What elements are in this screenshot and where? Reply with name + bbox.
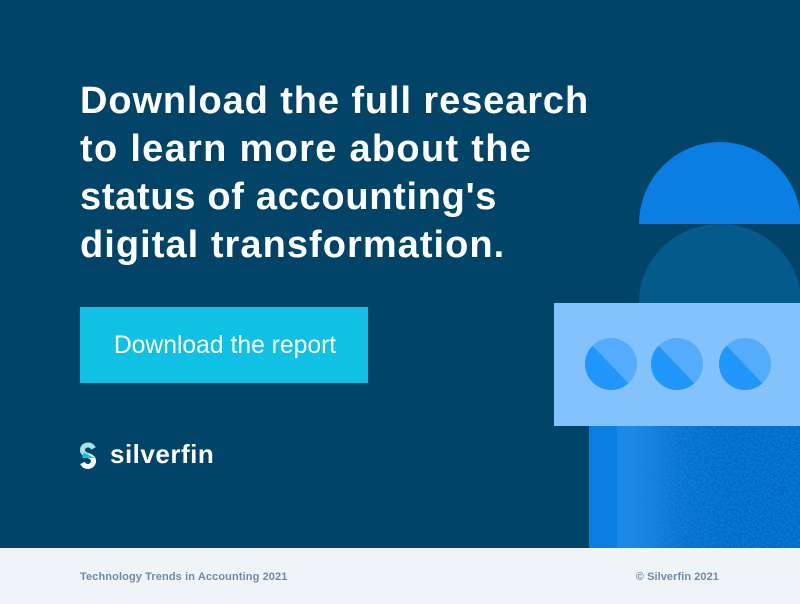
download button: Download the report	[114, 332, 336, 359]
download button	[80, 307, 368, 383]
title: status of accounting's	[80, 176, 497, 218]
footer left text: Technology Trends in Accounting 2021	[80, 571, 288, 583]
three circles	[585, 338, 771, 390]
footer right text: © Silverfin 2021	[636, 571, 719, 583]
footer bar	[0, 548, 800, 604]
illustration: abstract shapes	[554, 142, 800, 548]
light blue window panel	[554, 303, 800, 426]
title: Download the full research	[80, 80, 589, 122]
silverfin logo	[80, 439, 214, 469]
lower column	[589, 426, 800, 548]
wordmark: silverfin	[110, 439, 214, 469]
title: digital transformation.	[80, 224, 505, 266]
top semicircle	[639, 142, 800, 224]
middle dark circle	[639, 224, 800, 303]
title: to learn more about the	[80, 128, 532, 170]
title	[80, 80, 589, 266]
icon: S mark	[80, 442, 96, 469]
